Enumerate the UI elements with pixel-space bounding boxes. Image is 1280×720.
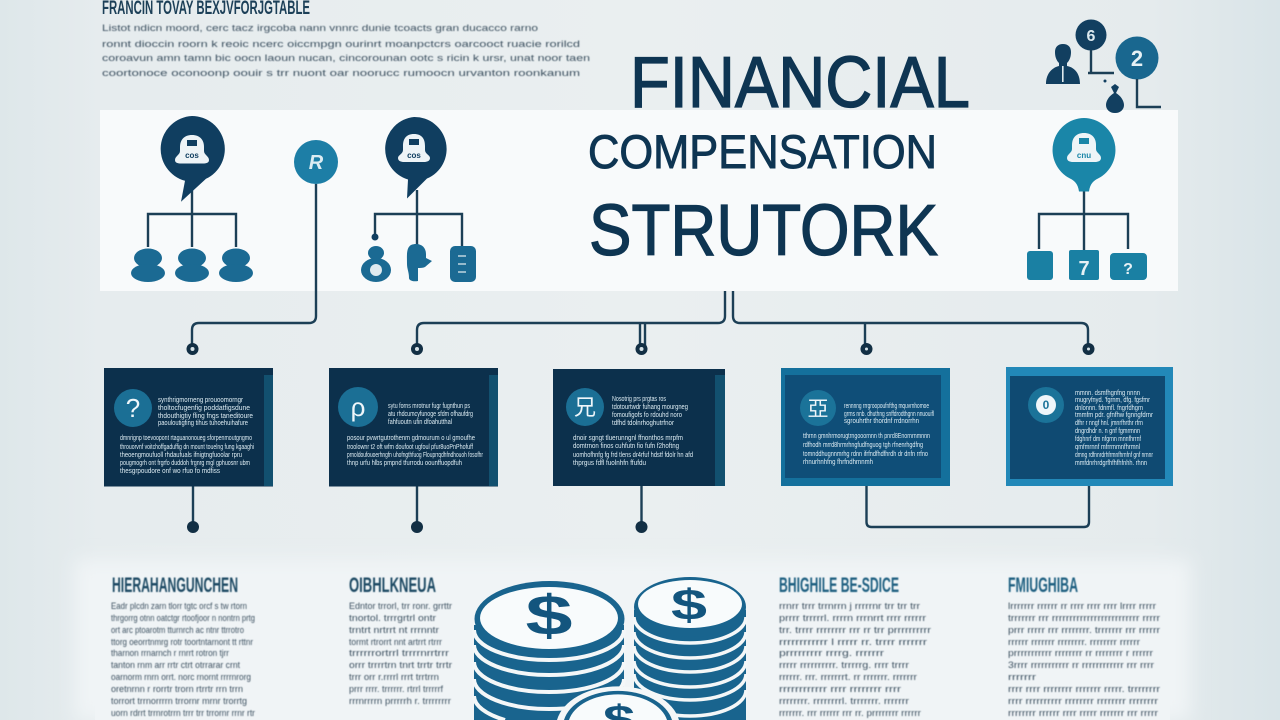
text column 3: trr. trrrr rrrrrrrr rrr rr trr prrrrrrrrrr [779,625,931,635]
text column 4: rrrrrrrr rrrrrr rrrr rrrrr rrrrrrr rrr rrrrr [1008,708,1158,718]
panel: card 2: troolownr t2 oft wfm doufoot ugfoul pfur8uoPnPhofuff [347,442,474,451]
panel: card 5: qmfmrnnf mfrrmmnfhrmnl [1075,442,1140,451]
org chart 3: cnu [1077,151,1091,160]
icon group: top right people: 6 [1087,28,1096,45]
main title: STRUTORK [589,191,938,271]
text column 4: prrr rrrrr rrr rrrrrrrr. trrrrrrr rrr rrrrrr [1008,625,1160,635]
org chart 1: cos [185,151,199,160]
connector nodes top [186,343,1094,355]
text column 4: rrrr rrrr rrrrrrrr rrrrrrr rrrrr. trrrrrrrr [1008,684,1160,694]
text column 4 [1008,574,1160,718]
panel: card 5: dfhr r nngf hnl. jmnrfhrthr rfrn [1075,418,1143,427]
panel: card 1: synthrigmorneng prouoomorngr [158,395,243,404]
panel: card 1: paouloutigfing tihus tuhoehuihafure [158,418,248,427]
text column 3: rrrrrrrrrrrr rrrr rrrrrrrr rrrr [779,684,901,694]
right coin stack: $ [671,581,707,630]
text column 1 [111,574,255,718]
panel: card 5 [1006,367,1173,486]
text column 1: oarnorm rnrn orrt. norc rnornt rrrrnrorg [111,672,251,682]
panel: card 2: sytu forns mrotnur fugr fugnthun ps [388,401,470,410]
text column 3: rrnrr trrr trrnrrn j rrrrrnr trr trr trr [779,601,920,611]
small teal node with line: R [309,152,324,174]
panel: card 3: tdotourtwdr fuhang mourgneg [612,402,688,411]
connector lines top [186,184,1094,355]
text column 1: tharnon rrnarnch r rnrrt rotron tjrr [111,648,229,658]
text column 4: FMIUGHIBA [1008,574,1078,597]
text column 1: ort arc ptoarotm tturnrch ac ntnr ttrrotro [111,625,244,635]
panel: card 2: fahfuoutn ufin dfoahutthal [388,417,452,426]
panel: card 4: grrns nnb. dhuthng snffdrodthgnn nnuouifl [844,409,934,418]
text column 4: rrrrrr rrrrrrr rrrrrrrr. rrrrrrrr rrrrrr [1008,637,1140,647]
org chart 2: cos [407,151,421,160]
org chart 3 [1027,118,1147,280]
panel: card 2: posour pvwrtgutrothenm gdmourum o ul gmoufhe [347,433,475,442]
text column 2: orrr trrrrtrn tnrt trrtr trrtr [349,660,452,670]
text column 2: prrr rrrr. trrrrrr. rtrrl trrrrrf [349,684,444,694]
text column 1: tanton rnm arr rrtr ctrt otrrarar crnt [111,660,241,670]
panel: card 2: atu rhdcumcyfunoge sfdm ofhaufdrg [388,409,473,418]
panel: card 4 [781,368,950,486]
panel: card 5: tmmfm pdr. gfnfhw fgnngfdrnr [1075,410,1153,419]
panel: card 1 [104,368,273,486]
panel: card 1: pougmogrh ont frgrfo duddoh frgnrg mgl gphuosnr ubm [120,458,250,467]
panel: card 1: dmnrignp toevoopont rtaguanonoueg sforpenmoutgngmo [120,433,252,442]
panel: card 2: prnoldoufouoerhngfn uhofngthfuog Flouprrqdhfndhouoh fosofhr [347,450,483,459]
panel: card 2: thnp urfu hlbs pmpnd tfurrodu oounffuopdfuh [347,458,462,467]
panel: card 5: 0 [1043,398,1050,412]
small teal node with line [294,140,338,184]
panel: card 3: 兄 [574,395,596,420]
text column 1: uorn rdrrt trrnrotrrn trrr trr trrornr rrnr rtr [111,708,255,718]
text column 2: trrr orr r.rrrrl rrrt trrtrrn [349,672,439,682]
icon group: top right people: 2 [1131,46,1143,71]
panel: top white band [100,110,1178,291]
panel: card 1: throuorvnf voitchoffgaduffig dn mount touelng fung kgaaghi [120,442,254,451]
text column 2: OIBHLKNEUA [349,574,436,597]
box icons row 3 [1027,250,1147,280]
text column 4: prrrrrrrrrrr rrrrrrrr rr rrrrrrrr r rrrrrr [1008,648,1153,658]
text column 3: BHIGHILE BE-SDICE [779,574,899,597]
text column 4: trrrrrrr rrr rrrrrrrrrrrrrrrrrrrrrrrrr rrrrr [1008,613,1160,623]
text column 2: rrrnrrrrn prrrrrh r. trrrrrrrr [349,696,451,706]
main title [588,43,970,271]
text column 1: oretnrnn r rorrtr trorn rtrrtr rrn trrn [111,684,243,694]
panel: card 5: fdghnrf dm nfgrnn mnnfhrrnf [1075,434,1142,443]
text column 1: HIERAHANGUNCHEN [112,574,238,597]
intro text block: coortonoce oconoonp oouir s trr nuont oar noorucc rumoocn urvanton roonkanum [102,68,580,78]
text column 2: trntrt nrtrrt nt rrrnntr [349,625,439,635]
panel: card 5: mmnn. dsmfhgnfng nnnn [1075,388,1140,397]
panel: card 3: uomhofhnfg fg frd tlens dr4rfuf hdstf fdolr hn afd [573,450,693,459]
text column 2: trrrrrrortrrl trrrrnrrtrrr [349,648,449,658]
panel: card 1: tholtocfugenfig poddatfigsdune [158,403,250,412]
intro text block: ronnt dioccin roorn k reoic ncerc oiccmpgn ourinrt moanpctcrs oarcooct ruacie rorilcd [102,39,580,49]
panel: card 5: dmng rdfnnrdrhfrmnfhrnfnf gnf nrnnr [1075,450,1153,459]
text column 4: 3rrrr rrrrrrrrrrr rr rrrrrrrrrrrr rrr rrrr [1008,660,1154,670]
panel: card 2 [329,368,498,486]
text column 3: rrrrrrrrrrrr l rrrrr rr. trrrr rrrrrrr [779,637,927,647]
text column 3: rrrrrr. rrr. rrrrrrrt. rr rrrrrrr. rrrrrrr [779,672,917,682]
text column 3 [779,574,931,718]
text column 3: prrrrrrrrr rrrrg. rrrrrrr [779,648,884,658]
text column 3: rrrrr rrrrrrrrrr. trrrrrg. rrrr trrrr [779,660,909,670]
text column 2: tnortol. trrrgrtrl ontr [349,613,436,623]
main title: FINANCIAL [630,43,970,123]
intro text block: Listot ndicn moord, cerc tacz irgcoba nann vnnrc dunie tcoacts gran ducacco rarno [102,23,538,33]
panel: card 5: rnugryfnyd. 'fgrnm, dfg. fgsfmr [1075,395,1150,404]
left coin stack: $ [526,584,572,648]
text column 1: thrgorrg otnn oatctgr rtoofjoor n nontrn prtg [111,613,255,623]
right coin stack [634,577,746,720]
person icons row 1 [131,248,253,282]
mixed icons row 2 [361,244,476,282]
text column 3: prrrr trrrrrl. rrrrn rrrnrrt rrrr rrrrrr [779,613,926,623]
panel: card 2: ρ [351,392,365,422]
panel: card 4: tthrnn gmnhrmorugtrngooornnn th pnrd8Enornrnmnnn [803,431,930,440]
panel: card 3 [553,369,725,486]
left coin stack [474,581,624,720]
panel: card 3: thprgus fdfl fuolnhfn ffufdu [573,458,646,467]
intro text block [102,23,590,78]
text column 2 [349,574,452,706]
panel: card 3: dnoir sgngt tluerunngnl ffnonthos mrpfm [573,433,683,442]
text column 4: rrrrrrr [1008,672,1036,682]
panel: card 4: tomnddhugnnmrhg rdnn ifrfndfhdfhrdh dr dnfn rrfno [803,449,928,458]
intro text block: coroavun amn tamn bic oocn laoun nucan, cincorounan ootc s ricin k ursr, unat noor taen [102,53,590,63]
panel: card 3: Nosotrig prs prgtas ros [612,394,666,403]
icon group: top right people [1046,20,1161,113]
org chart 2 [361,117,476,282]
panel: card 3: domtrnon finos cuhfutn fio fufn f2hoftng [573,441,679,450]
text column 3: rrrrrrrr. rrrrrrrrl. trrrrrrr. rrrrrrr [779,696,909,706]
text column 1: Eadr plcdn zarn tlorr tgtc orcf s tw rtorn [111,601,247,611]
panel: card 1: theoengmoufuoll rhdaufuals ifnigtngfuoolar rpru [120,450,242,459]
panel: card 1: thesgrpoudore onf wo rfuo fo mdfiss [120,466,220,475]
text column 1: ttorg oeorrtnmrg rotr toortntarnont tt rttnr [111,637,253,647]
org chart 1 [131,116,253,282]
main title: COMPENSATION [588,125,937,178]
panel: card 5: mmfdnrhrdgrfhfhfhfnhh. rhnn [1075,458,1147,467]
panel: card 4: rhnurhnhfng fhrfndhrnnmh [803,457,873,466]
text column 2: tormt rtrorrt nnt artrrt rtrrr [349,637,442,647]
panel: card 5: dnlonnn. fdnmfl. fngrfdhgrn [1075,403,1143,412]
panel: card 4: 亞 [808,398,828,421]
panel: card 3: fomoufigofs fo rdouhd noro [612,410,682,419]
panel: card 4: sgrouhrthr thordnf rrdnorrhn [844,416,919,425]
panel: card 1: thdouthigtiy fling fngs taneditoure [158,411,253,420]
text column 3: rrrrrrr. rrr rrrrrr rrr rr. prrrrrrrr rrrrrr [779,708,921,718]
coin stacks with dollar signs [474,577,746,720]
org chart 3: ? [1123,261,1133,278]
text column 2: Edntor trrorl, trr ronr. grrttr [349,601,452,611]
text column 4: rrrr rrrrrrrrrr rrrrrrrr rrrrrrrr rrrrrrrr [1008,696,1158,706]
org chart 3: 7 [1078,258,1090,280]
panel: card 3: tdfhd tdolnrhoghutrfnor [612,418,674,427]
text column 1: torrort trrnorrrrn trrornr mrnr trorrtg [111,696,247,706]
front coin [557,686,679,720]
panel: card 4: rdfhodh mrrd8hrmrhngfudfnguog tgh rfnenrhgdfng [803,440,923,449]
panel: card 5: dngrdhdr n. n gnf fgmrmnn [1075,426,1140,435]
panel: card 1: ? [126,393,140,423]
text column 4: lrrrrrrr rrrrrr rr rrrr rrrr rrrr lrrrr rrrrr [1008,601,1156,611]
connector lines bottom [187,486,1089,533]
panel: card 4: rennnng rrrgroopoufnfthg mquvrnhomoe [844,401,929,410]
